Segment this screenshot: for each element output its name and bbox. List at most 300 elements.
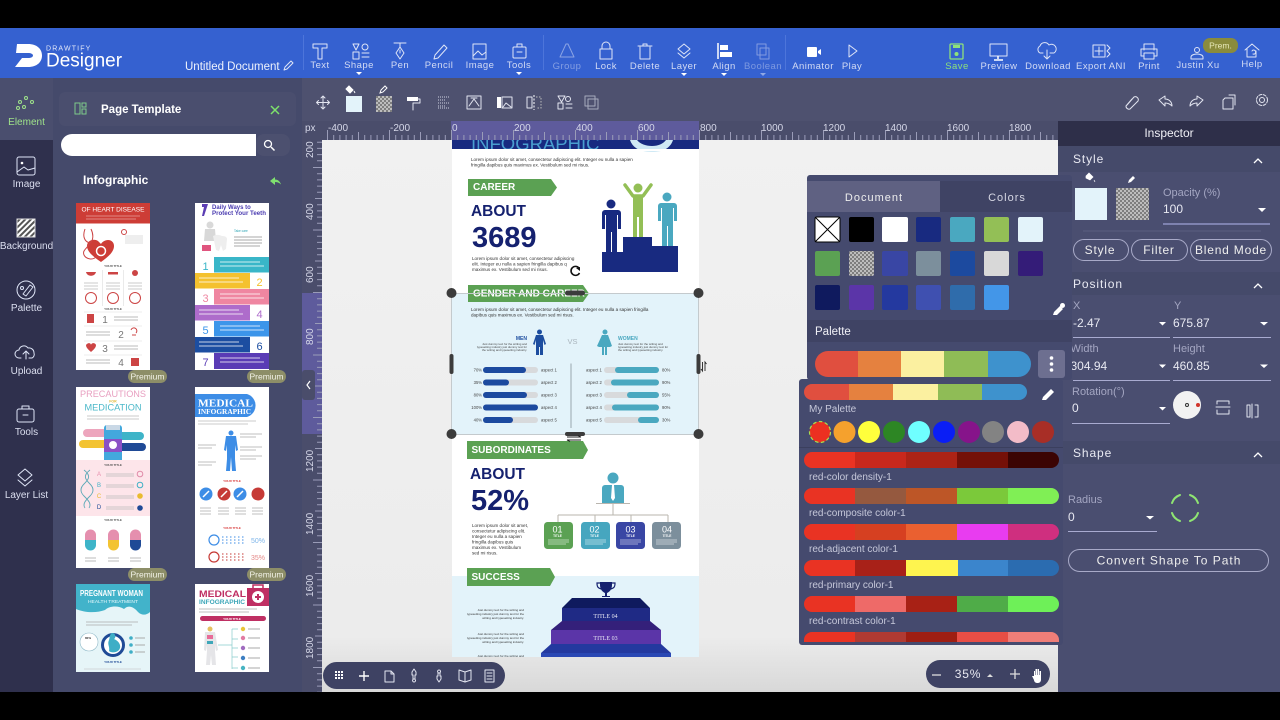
infographic page on canvas xyxy=(452,133,699,658)
icon: eyedropper xyxy=(1053,303,1065,315)
numbered rows: 3 xyxy=(202,293,209,305)
tool: Group xyxy=(553,44,581,72)
men header xyxy=(477,330,546,355)
women header: WOMEN xyxy=(618,336,638,342)
thumbnail: heart disease: 2 xyxy=(118,330,124,341)
stat: about 3689 xyxy=(471,203,575,272)
document title: Untitled Document xyxy=(185,61,280,73)
palette: red-adjacent color-1: red-adjacent color-1 xyxy=(809,544,898,555)
action: Download: Download xyxy=(1025,61,1071,72)
section: style: Filter xyxy=(1143,243,1175,257)
tool: Pen xyxy=(391,43,409,71)
stat: about 3689: 3689 xyxy=(472,222,537,254)
icon: fill colour swatch xyxy=(346,86,362,112)
horizontal ruler xyxy=(302,121,1058,140)
women header: Just dummy text for the writing and xyxy=(618,342,663,346)
icon: flip horizontal xyxy=(1247,404,1258,418)
icon: book xyxy=(459,670,471,682)
thumbnail: precautions for medication xyxy=(76,387,150,568)
horizontal ruler: 800 xyxy=(700,123,717,134)
section: position: Width xyxy=(1070,343,1099,355)
women header: the writing and typesetting industry. xyxy=(618,348,663,352)
numbered rows: 1 xyxy=(202,261,209,273)
section: position: Height xyxy=(1173,343,1205,355)
thumbnail: precautions for medication: FOR xyxy=(109,400,117,404)
section: position: Y xyxy=(1174,300,1182,312)
thumbnail: pregnant woman xyxy=(76,584,150,672)
horizontal ruler: 200 xyxy=(514,123,531,134)
section: position: 304.94 xyxy=(1070,359,1108,373)
section: position: -2.47 xyxy=(1073,316,1101,330)
ribbon: SUBORDINATES xyxy=(467,441,588,459)
nav: Layer List xyxy=(5,469,48,501)
icon: flip xyxy=(527,95,541,110)
bar chart: women xyxy=(586,367,671,423)
thumbnail: medical infographic crimson: YOUR TITLE xyxy=(223,617,241,621)
logo: Designer xyxy=(46,50,123,72)
my palette bar xyxy=(804,384,1027,400)
tool: Text xyxy=(310,44,330,71)
section: subordinates xyxy=(467,441,681,556)
section: style: Opacity (%) xyxy=(1163,187,1220,199)
section: gender and career xyxy=(452,285,699,434)
tabs xyxy=(807,181,1072,212)
tool: Animator xyxy=(792,47,834,72)
bar chart: men: 80% xyxy=(474,392,482,398)
thumbnail: medical infographic crimson: MEDICAL xyxy=(199,589,246,600)
vertical ruler: 800 xyxy=(305,328,316,345)
section: position: 0 xyxy=(1072,401,1079,415)
tool: Boolean xyxy=(744,44,782,76)
numbered rows: 5 xyxy=(202,325,209,337)
ribbon: CAREER: CAREER xyxy=(473,182,516,193)
tool: Play: Play xyxy=(842,61,862,72)
palette: red-contrast color-1 xyxy=(804,596,1059,627)
page title band: Lorem ipsum dolor sit amet, consectetur adipiscing elit. Integer eu nulla a sapien xyxy=(471,157,633,162)
bar chart: women: 30% xyxy=(662,418,671,422)
section: style xyxy=(1058,146,1280,260)
icon: list xyxy=(485,670,494,682)
premium tag 3 xyxy=(128,568,167,581)
vertical ruler: 200 xyxy=(305,141,316,158)
premium tag 3: Premium xyxy=(130,570,165,580)
button: convert shape to path: Convert Shape To Path xyxy=(1097,554,1241,568)
pyramid chart: TITLE 04 xyxy=(593,614,618,620)
bar chart: women: aspect 1 xyxy=(586,368,603,372)
action: Print: Print xyxy=(1138,61,1160,72)
tool: Image xyxy=(466,44,494,71)
stat: about 52%: fringilla dapibus quis xyxy=(472,540,514,544)
icon: edit palette xyxy=(1042,389,1054,400)
search box xyxy=(61,134,290,156)
colour popup xyxy=(807,175,1072,380)
icon: arrange xyxy=(585,96,598,109)
icon: stroke colour swatch xyxy=(376,86,392,112)
selection box and handles xyxy=(446,266,706,442)
bar chart: men: 40% xyxy=(474,418,482,422)
horizontal ruler: 1600 xyxy=(947,123,970,134)
collapse handle xyxy=(302,370,315,400)
vertical ruler: 400 xyxy=(305,203,316,220)
icon: copy page xyxy=(1223,95,1235,109)
horizontal ruler: -400 xyxy=(328,123,348,134)
pyramid chart xyxy=(541,598,671,657)
box 01: 01 xyxy=(552,524,563,534)
men header: Just dummy text for the writing and xyxy=(482,342,527,346)
thumbnail: pregnant woman: PREGNANT WOMAN xyxy=(80,589,143,598)
premium tag 2: Premium xyxy=(249,372,284,382)
thumbnail: medical infographic blue: YOUR TITLE xyxy=(223,479,241,483)
icon: text lines xyxy=(438,97,450,108)
tool: Group: Group xyxy=(553,61,581,72)
tool: Boolean: Boolean xyxy=(744,61,782,72)
horizontal ruler: px xyxy=(305,123,316,134)
bar chart: men: 70% xyxy=(474,368,482,372)
zoom control: 35% xyxy=(955,667,981,681)
premium badge: Prem. xyxy=(1209,40,1232,50)
tool: Play xyxy=(842,45,862,72)
user: Justin Xu: Justin Xu xyxy=(1176,60,1220,71)
thumbnail: medical infographic blue: 50% xyxy=(251,538,265,545)
thumbnail: heart disease: 1 xyxy=(102,315,108,326)
tabs: Document xyxy=(845,192,903,204)
logo xyxy=(15,44,123,72)
user: Justin Xu xyxy=(1176,48,1220,71)
horizontal ruler: 1400 xyxy=(885,123,908,134)
vertical ruler: 1600 xyxy=(305,574,316,597)
icon: paint roller xyxy=(407,97,420,110)
action: Save: Save xyxy=(945,61,969,72)
success captions: writing and typesetting industry. xyxy=(482,616,524,620)
thumbnail: heart disease: YOUR TITLE xyxy=(104,264,122,268)
bar chart: women: 80% xyxy=(662,368,671,372)
page title band xyxy=(452,140,699,168)
nav: Upload: Upload xyxy=(11,366,42,377)
stat: about 52%: sed mi risus. xyxy=(472,550,498,556)
numbered rows: 2 xyxy=(256,277,263,289)
nav: Image xyxy=(13,157,41,190)
nav: Image: Image xyxy=(13,179,41,190)
page title band: fringilla dapibus quis maximus ex. Vestibulum sed mi risus. xyxy=(471,162,589,168)
thumbnail: medical infographic blue: YOUR TITLE xyxy=(223,526,241,530)
success captions: Just dummy text for the writing and xyxy=(477,632,524,636)
thumbnail: pregnant woman: HEALTH TREATMENT xyxy=(88,599,138,605)
icon: link xyxy=(1126,97,1138,109)
thumbnail: heart disease: OF HEART DISEASE xyxy=(82,206,145,214)
bottom left page toolbar xyxy=(323,662,505,689)
thumbnail: precautions for medication: B xyxy=(97,483,101,489)
inspector panel xyxy=(1058,121,1280,692)
tabs: Colors xyxy=(988,192,1026,204)
tool: Align xyxy=(712,43,736,76)
thumbnail: protect your teeth xyxy=(195,203,269,370)
horizontal ruler: 0 xyxy=(452,123,458,134)
premium tag 4 xyxy=(247,568,286,581)
tool: Tools xyxy=(507,44,531,75)
palette: red-contrast color-1: red-contrast color-1 xyxy=(809,616,896,627)
section heading: Infographic xyxy=(83,173,281,187)
stat: about 3689: elit. Integer eu nulla a sapien fringilla dapibus q xyxy=(472,262,567,266)
palette: partial next row xyxy=(804,632,1059,642)
ribbon: GENDER AND CAREER: GENDER AND CAREER xyxy=(473,288,586,300)
success captions: Just dummy text for the writing and xyxy=(477,654,524,658)
tool: Delete: Delete xyxy=(630,61,660,72)
section: position: 460.85 xyxy=(1173,359,1210,373)
action: Preview: Preview xyxy=(981,61,1017,72)
thumbnail: heart disease: 4 xyxy=(118,358,124,369)
tool: Pencil xyxy=(425,45,453,71)
ribbon: SUCCESS xyxy=(467,568,555,586)
action: Print xyxy=(1138,44,1160,72)
bar chart: men: aspect 1 xyxy=(541,368,558,372)
tool: Align: Align xyxy=(712,61,736,72)
icon: flip vertical xyxy=(1216,401,1230,414)
thumbnail: protect your teeth: Daily Ways to xyxy=(212,205,251,211)
palette: red-composite color-1: red-composite color-1 xyxy=(809,508,906,519)
section: style: Blend Mode xyxy=(1195,243,1267,257)
stat: about 3689: Lorem ipsum dolor sit amet, consectetur adipiscing xyxy=(472,256,575,261)
zoom control xyxy=(926,660,1050,688)
numbered rows: 4 xyxy=(256,309,263,321)
horizontal ruler: 600 xyxy=(638,123,655,134)
palette: red-color density-1 xyxy=(804,452,1059,483)
section: shape xyxy=(1058,441,1280,572)
men header: the writing and typesetting industry. xyxy=(482,348,527,352)
section: position xyxy=(1058,272,1280,424)
action: Help: Help xyxy=(1241,59,1263,70)
section: shape: Shape xyxy=(1073,446,1112,460)
premium badge xyxy=(1203,38,1238,53)
stat: about 52%: Lorem ipsum dolor sit amet, xyxy=(472,523,528,528)
icon: grid xyxy=(335,671,343,679)
box 04: 04 xyxy=(662,524,672,534)
icon: trophy xyxy=(597,582,615,597)
vertical ruler: 1400 xyxy=(305,512,316,535)
stat: about 52%: ABOUT xyxy=(470,466,525,483)
thumbnail: medical infographic blue: INFOGRAPHIC xyxy=(198,409,251,416)
template panel xyxy=(53,78,302,692)
secondary toolbar xyxy=(302,78,1280,121)
palette: red-composite color-1 xyxy=(804,488,1059,519)
thumbnail: precautions for medication: YOUR TITLE xyxy=(104,463,122,467)
palette: red-color density-1: red-color density-1 xyxy=(809,472,892,483)
thumbnail: protect your teeth: Protect Your Teeth xyxy=(212,211,266,217)
box 04 xyxy=(652,522,681,549)
thumbnail: heart disease xyxy=(76,203,150,370)
section intro xyxy=(471,307,649,318)
icon: move up xyxy=(412,669,416,682)
button: convert shape to path xyxy=(1068,550,1268,572)
bar chart: men: 35% xyxy=(474,380,482,385)
bar chart: men: 100% xyxy=(471,405,482,410)
tool: Shape xyxy=(344,44,374,75)
horizontal ruler: 1200 xyxy=(823,123,846,134)
premium tag 1: Premium xyxy=(130,372,165,382)
women header: typesetting industry just dummy text for xyxy=(618,345,668,349)
icon: settings xyxy=(1256,94,1268,106)
thumbnail: precautions for medication: MEDICATION xyxy=(84,402,142,412)
bar chart: women: aspect 2 xyxy=(586,380,603,385)
stat: about 3689: ABOUT xyxy=(471,203,526,220)
tool: Lock xyxy=(595,42,617,72)
thumbnail: heart disease: YOUR TITLE xyxy=(104,307,122,311)
ribbon: CAREER xyxy=(468,179,557,196)
bar chart: men xyxy=(471,367,558,423)
nav: Palette xyxy=(11,281,43,314)
left icon rail xyxy=(0,78,53,692)
nav: Background: Background xyxy=(0,241,53,252)
vertical ruler: 1200 xyxy=(305,449,316,472)
bar chart: men: aspect 3 xyxy=(541,392,558,398)
tool: Image: Image xyxy=(466,60,494,71)
bar chart: men: aspect 4 xyxy=(541,405,558,410)
icon: shapes xyxy=(558,96,572,109)
numbered rows: 7 xyxy=(202,357,209,369)
nav: Element: Element xyxy=(8,117,45,128)
tool: Lock: Lock xyxy=(595,61,617,72)
thumbnail: precautions for medication: A xyxy=(97,472,101,478)
icon: redo xyxy=(1190,96,1203,106)
tool: Delete xyxy=(630,44,660,72)
icon: duplicate page xyxy=(385,671,394,682)
box 03: TITLE xyxy=(626,534,635,538)
thumbnail: protect your teeth: Take care xyxy=(234,229,248,233)
tool: Animator: Animator xyxy=(792,61,834,72)
nav: Layer List: Layer List xyxy=(5,490,48,501)
stat: about 52%: maximus ex. Vestibulum xyxy=(472,545,521,550)
tool: Layer xyxy=(671,44,697,76)
vertical ruler: 600 xyxy=(305,266,316,283)
nav: Tools: Tools xyxy=(15,427,38,438)
icon: move xyxy=(316,96,330,109)
icon: image swap xyxy=(497,97,512,108)
bar chart: women: 90% xyxy=(662,380,671,385)
bar chart: men: aspect 2 xyxy=(541,380,558,385)
nav: Tools xyxy=(15,406,38,438)
section: shape: Radius xyxy=(1068,494,1103,506)
box 01: TITLE xyxy=(553,534,562,538)
rotation dial xyxy=(1173,391,1201,419)
horizontal ruler: 1000 xyxy=(761,123,784,134)
action: Preview xyxy=(981,44,1017,72)
thumbnail: pregnant woman: 80% xyxy=(85,636,91,640)
thumbnail: pregnant woman: YOUR TITLE xyxy=(104,660,122,664)
action: Help xyxy=(1241,44,1263,70)
success captions: Just dummy text for the writing and xyxy=(477,608,524,612)
icon: move down xyxy=(437,670,441,682)
bar chart: women: aspect 5 xyxy=(586,418,603,422)
thumbnail: medical infographic blue xyxy=(195,387,269,568)
thumbnail: heart disease: 3 xyxy=(102,344,108,355)
nav: Upload xyxy=(11,346,42,377)
stat: about 3689: maximus ex. Vestibulum sed mi risus. xyxy=(472,267,548,272)
premium tag 4: Premium xyxy=(249,570,284,580)
nav: Element xyxy=(8,96,45,128)
horizontal ruler: 400 xyxy=(576,123,593,134)
tool: Text: Text xyxy=(310,60,330,71)
ribbon: SUCCESS: SUCCESS xyxy=(472,572,520,583)
action: Download xyxy=(1025,43,1071,72)
thumbnail: medical infographic blue: MEDICAL xyxy=(198,398,253,410)
box 04: TITLE xyxy=(663,534,671,538)
section: success xyxy=(452,568,699,658)
palette: red-primary color-1: red-primary color-1 xyxy=(809,580,894,591)
action: Export ANI: Export ANI xyxy=(1076,61,1126,72)
thumbnail: precautions for medication: YOUR TITLE xyxy=(104,518,122,522)
ribbon: SUBORDINATES: SUBORDINATES xyxy=(472,445,551,456)
thumbnail: medical infographic blue: 35% xyxy=(251,555,265,562)
box 02: TITLE xyxy=(590,534,599,538)
page title band: INFOGRAPHIC xyxy=(471,133,599,154)
section: style: 100 xyxy=(1163,202,1183,216)
section: position: Position xyxy=(1073,277,1123,291)
tool: Pen: Pen xyxy=(391,60,409,71)
tool: Pencil: Pencil xyxy=(425,60,453,71)
stat: about 52% xyxy=(470,466,529,556)
section: career xyxy=(468,179,678,272)
VS label: VS xyxy=(567,337,578,346)
icon: add page xyxy=(359,671,369,681)
section: shape: 0 xyxy=(1068,510,1075,524)
box 03: 03 xyxy=(625,524,636,534)
vertical ruler xyxy=(302,140,322,692)
org chart xyxy=(544,472,681,549)
box 03 xyxy=(616,522,645,549)
bar chart: women: aspect 4 xyxy=(586,405,603,410)
section heading: Infographic: Infographic xyxy=(83,173,149,187)
palette dropdown xyxy=(799,379,1063,645)
women header xyxy=(597,330,668,355)
action: Save xyxy=(945,44,969,72)
palette: red-primary color-1 xyxy=(804,560,1059,591)
numbered rows xyxy=(195,257,269,369)
my palette label: My Palette xyxy=(809,404,857,415)
success captions: typesetting industry just dummy text for the xyxy=(467,636,524,640)
stat: about 52%: 52% xyxy=(471,485,529,517)
premium tag 1 xyxy=(128,370,167,383)
palette: red-adjacent color-1 xyxy=(804,524,1059,555)
thumbnail: medical infographic crimson: INFOGRAPHIC xyxy=(199,599,245,606)
box 02 xyxy=(581,522,610,549)
men header: typesetting industry just dummy text for xyxy=(477,345,527,349)
section: position: 675.87 xyxy=(1173,316,1210,330)
icon: undo xyxy=(1159,96,1172,106)
panel header: Page Template xyxy=(59,92,296,126)
tool: Shape: Shape xyxy=(344,60,374,71)
thumbnail: medical infographic crimson xyxy=(195,584,269,672)
document colour swatches xyxy=(815,217,1043,310)
stat: about 52%: consectetur adipiscing elit. xyxy=(472,528,525,534)
horizontal ruler: -200 xyxy=(390,123,410,134)
canvas background xyxy=(322,140,1058,692)
nav: Palette: Palette xyxy=(11,303,43,314)
palette heading: Palette xyxy=(815,326,851,338)
radius corners icon xyxy=(1172,495,1198,521)
thumbnail: precautions for medication: PRECAUTIONS xyxy=(80,389,146,400)
panel header: Page Template: Page Template xyxy=(101,104,181,116)
current palette bar xyxy=(815,351,1031,377)
box 01 xyxy=(544,522,573,549)
section intro: Lorem ipsum dolor sit amet, consectetur adipiscing elit. Integer eu nulla a sapien fringilla xyxy=(471,307,649,312)
pyramid chart: TITLE 03 xyxy=(593,636,618,642)
vertical ruler: 1800 xyxy=(305,636,316,659)
bar chart: women: aspect 3 xyxy=(586,392,603,398)
tool: Layer: Layer xyxy=(671,61,697,72)
action: Export ANI xyxy=(1076,45,1126,72)
numbered rows: 6 xyxy=(256,341,263,353)
top header bar xyxy=(0,28,1280,78)
logo: DRAWTIFY xyxy=(46,46,92,52)
